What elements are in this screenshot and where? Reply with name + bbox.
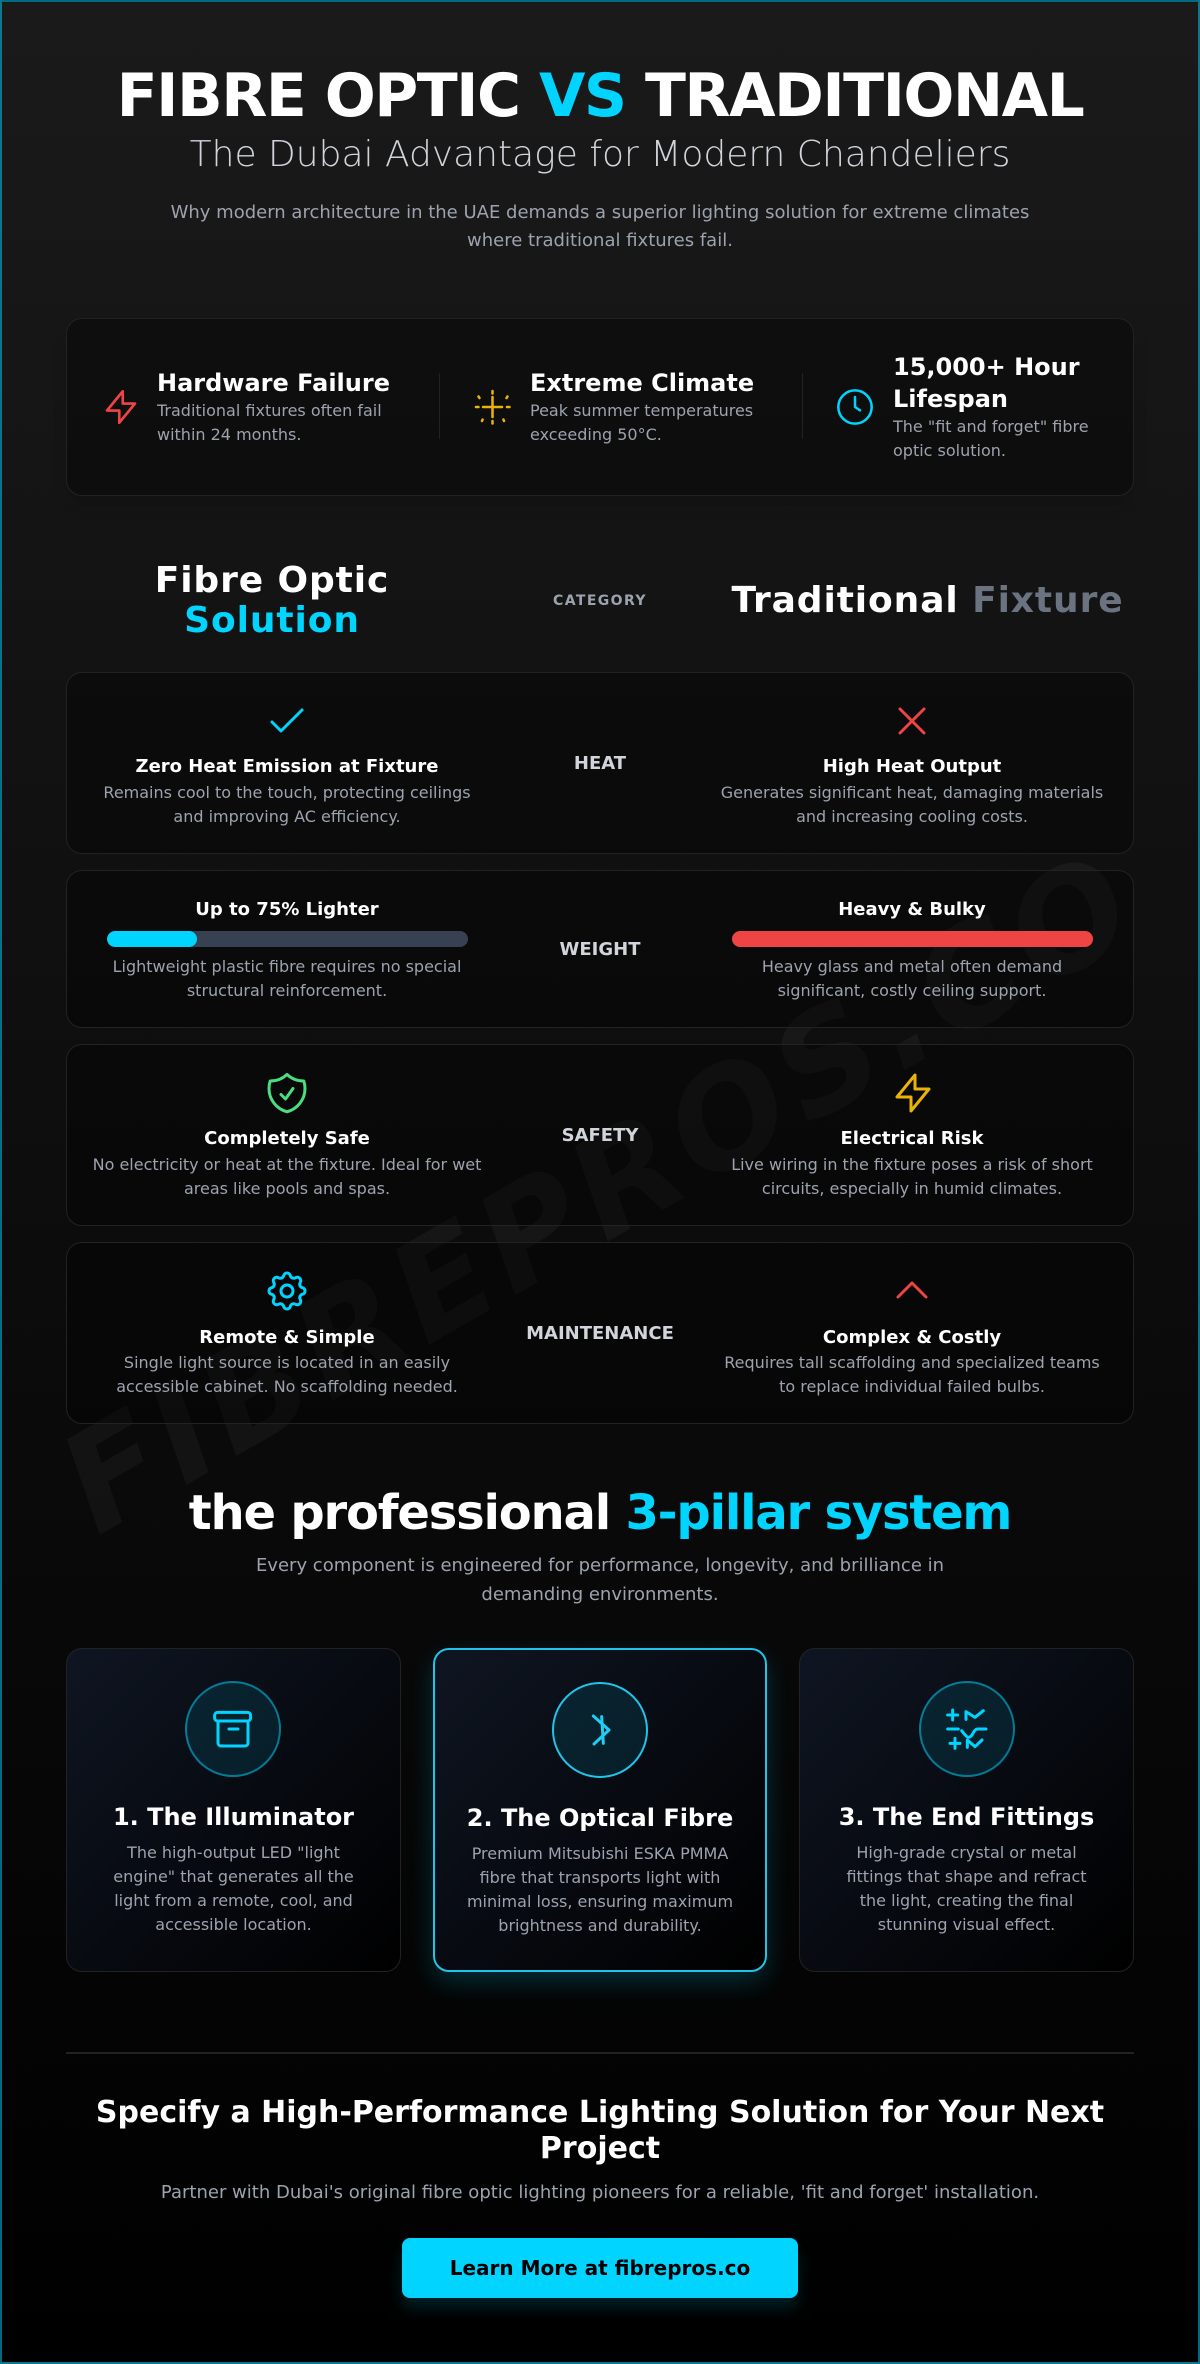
panel: key stats [66,318,1134,496]
section intro: Every component is engineered for performance, longevity, and brilliance in [256,1555,944,1576]
watermark: FIBREPROS.CO [35,821,1165,1565]
call to action heading [96,2095,1104,2166]
stat: hardware failure: Traditional fixtures often fail [157,401,382,420]
description: high heat: Generates significant heat, damaging materials [721,783,1103,802]
column heading: fibre optic [155,560,389,641]
text: end fittings: stunning visual effect. [878,1915,1055,1934]
label: weight: WEIGHT [560,939,640,960]
icon: lifespan clock [837,389,873,425]
description: zero heat [103,783,471,826]
text: end fittings: fittings that shape and refract [846,1867,1087,1886]
icon: hardware failure bolt [106,390,136,424]
heading: optical fibre: 2. The Optical Fibre [467,1804,733,1832]
text: remote: Remote & Simple [199,1327,375,1348]
text: optical fibre: minimal loss, ensuring maximum [467,1892,733,1911]
column heading: fibre optic: Fibre Optic [155,560,389,601]
description: electrical risk [731,1155,1093,1198]
column heading: traditional: Traditional Fixture [731,580,1124,621]
description: lighter [113,957,461,1000]
button: Learn More at fibrepros.co [450,2256,750,2280]
text: end fittings [846,1843,1087,1934]
text: optical fibre: brightness and durability. [498,1916,702,1935]
label: maintenance: MAINTENANCE [526,1323,674,1344]
row: weight [66,870,1134,1028]
description: complex: Requires tall scaffolding and specialized teams [724,1353,1100,1372]
button [402,2238,798,2298]
text: complex: Complex & Costly [823,1327,1001,1348]
description: remote: Single light source is located in an easily [124,1353,450,1372]
column heading: category: CATEGORY [553,593,647,609]
description: complex [724,1353,1100,1396]
section intro: demanding environments. [481,1584,719,1605]
section heading: the professional 3-pillar system [189,1485,1011,1541]
text: illuminator: light from a remote, cool, and [114,1891,353,1910]
stat: lifespan: The "fit and forget" fibre [893,417,1089,436]
column heading: fibre optic: Solution [184,600,360,641]
description: high heat: and increasing cooling costs. [796,807,1028,826]
icon: fittings [946,1708,988,1750]
text: lighter: Up to 75% Lighter [195,899,379,920]
icon: cross [898,707,926,735]
description: heavy: significant, costly ceiling support. [778,981,1046,1000]
stat: lifespan: optic solution. [893,441,1006,460]
text: heavy: Heavy & Bulky [838,899,986,920]
stat: lifespan [892,353,1089,460]
section intro [256,1555,944,1605]
call to action heading: Specify a High-Performance Lighting Solution for Your Next [96,2095,1104,2130]
description: zero heat: and improving AC efficiency. [173,807,401,826]
text: zero heat: Zero Heat Emission at Fixture [136,756,438,777]
intro text: Why modern architecture in the UAE demands a superior lighting solution for extreme climates [171,202,1029,223]
bar: fibre weight [107,931,468,947]
text: high heat: High Heat Output [823,756,1001,777]
text: safe: Completely Safe [204,1128,370,1149]
text: illuminator: accessible location. [155,1915,312,1934]
intro text: where traditional fixtures fail. [467,230,733,251]
stat: hardware failure: Hardware Failure [157,369,390,397]
stat: extreme climate: Extreme Climate [530,369,754,397]
heading: end fittings: 3. The End Fittings [839,1803,1094,1831]
title: FIBRE OPTIC VS TRADITIONAL [117,61,1083,131]
stat: hardware failure [156,369,390,444]
description: remote [116,1353,458,1396]
description: remote: accessible cabinet. No scaffolding needed. [116,1377,458,1396]
panel: illuminator [66,1648,401,1972]
stat: extreme climate [530,369,754,444]
row: maintenance [66,1242,1134,1424]
stat: extreme climate: Peak summer temperatures [530,401,753,420]
description: heavy: Heavy glass and metal often demand [762,957,1062,976]
icon: fibre strands [592,1714,611,1746]
description: safe: areas like pools and spas. [184,1179,390,1198]
text: illuminator: engine" that generates all the [113,1867,354,1886]
stat: lifespan: 15,000+ Hour [893,353,1080,381]
description: electrical risk: circuits, especially in humid climates. [762,1179,1062,1198]
description: high heat [721,783,1103,826]
icon: shield [268,1072,306,1114]
call to action heading: Project [540,2131,660,2166]
stat: hardware failure: within 24 months. [157,425,301,444]
text: optical fibre [467,1844,733,1935]
text: illuminator [113,1843,354,1934]
label: heat: HEAT [574,753,626,774]
icon: chevron [896,1281,928,1299]
call to action text: Partner with Dubai's original fibre optic lighting pioneers for a reliable, 'fit and forget' installation. [161,2182,1039,2203]
text: end fittings: High-grade crystal or metal [856,1843,1077,1862]
description: lighter: structural reinforcement. [187,981,387,1000]
description: safe [93,1155,481,1198]
icon: illuminator box [213,1710,252,1748]
panel: optical fibre [433,1648,767,1972]
heading: illuminator: 1. The Illuminator [113,1803,354,1831]
description: heavy [762,957,1062,1000]
icon circle: optical fibre [552,1682,648,1778]
icon circle: end fittings [919,1681,1015,1777]
row: safety [66,1044,1134,1226]
bar: traditional weight [732,931,1093,947]
subtitle: The Dubai Advantage for Modern Chandeliers [190,134,1010,175]
stat: lifespan: Lifespan [893,385,1008,413]
stat: extreme climate: exceeding 50°C. [530,425,662,444]
panel: end fittings [799,1648,1134,1972]
icon circle: illuminator [185,1681,281,1777]
text: optical fibre: Premium Mitsubishi ESKA PMMA [472,1844,728,1863]
description: electrical risk: Live wiring in the fixture poses a risk of short [731,1155,1093,1174]
intro text [171,202,1029,251]
icon: check [270,708,304,733]
description: lighter: Lightweight plastic fibre requires no special [113,957,461,976]
text: end fittings: the light, creating the final [860,1891,1073,1910]
label: safety: SAFETY [562,1125,638,1146]
description: safe: No electricity or heat at the fixture. Ideal for wet [93,1155,481,1174]
description: complex: to replace individual failed bulbs. [779,1377,1045,1396]
icon: gear [268,1272,306,1310]
icon: extreme climate sun [474,390,511,425]
description: zero heat: Remains cool to the touch, protecting ceilings [103,783,471,802]
text: illuminator: The high-output LED "light [127,1843,340,1862]
text: electrical risk: Electrical Risk [841,1128,983,1149]
row: heat [66,672,1134,854]
icon: electrical bolt [895,1074,931,1112]
text: optical fibre: fibre that transports light with [480,1868,720,1887]
